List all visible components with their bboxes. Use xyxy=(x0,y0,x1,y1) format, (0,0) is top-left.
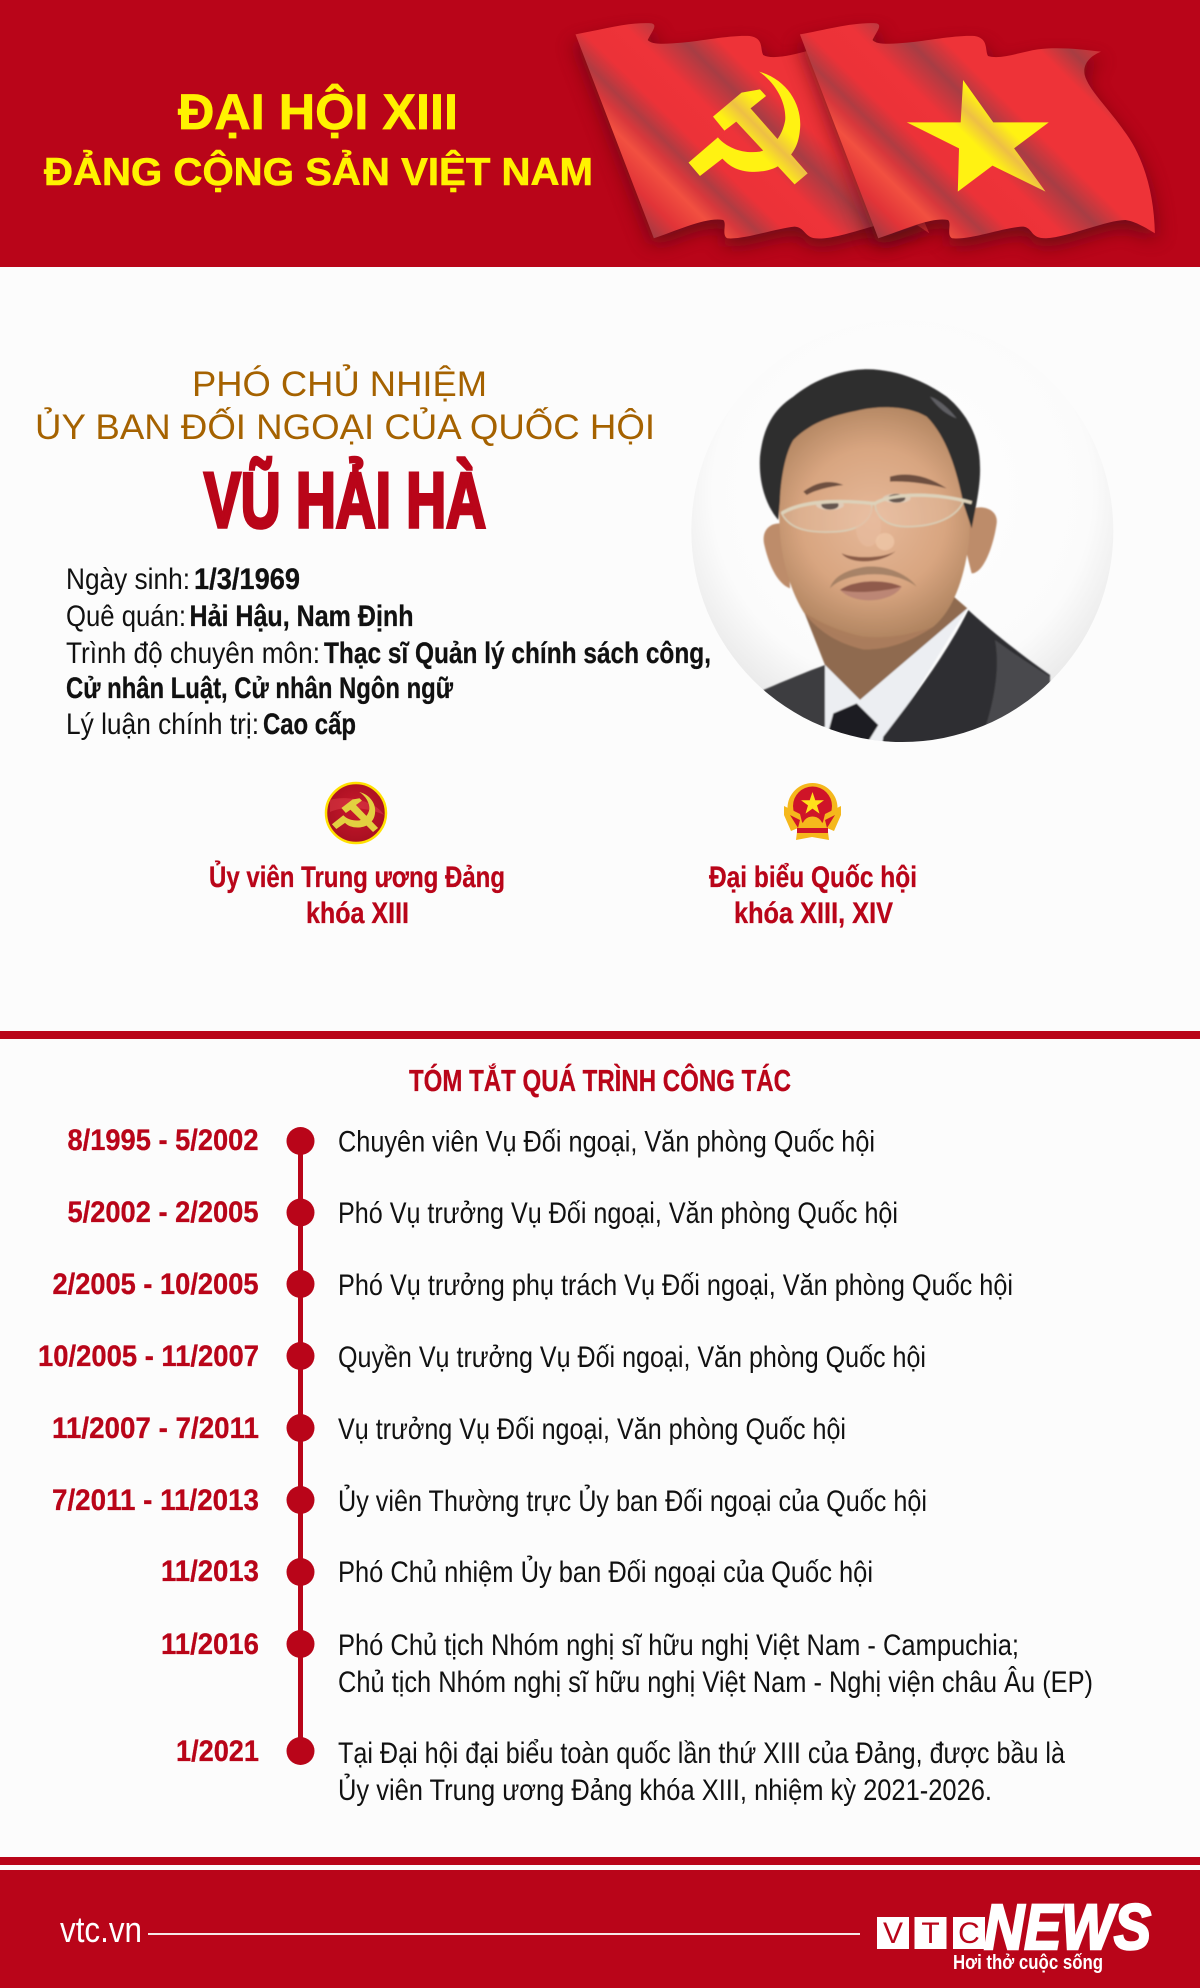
biography facts: Hải Hậu, Nam Định xyxy=(190,600,414,633)
footer background xyxy=(0,1870,1200,1988)
icon: national flag xyxy=(800,23,1155,247)
logo: VTC News: NEWS xyxy=(984,1891,1151,1963)
membership: party central committee: Ủy viên Trung ương Đảng xyxy=(209,860,505,894)
membership: party central committee xyxy=(209,860,505,930)
row 4: 10/2005 - 11/2007 xyxy=(38,1340,259,1373)
logo: VTC News: Hơi thở cuộc sống xyxy=(953,1952,1103,1974)
icon: national emblem xyxy=(784,783,841,840)
row 4: Quyền Vụ trưởng Vụ Đối ngoại, Văn phòng Quốc hội xyxy=(338,1341,926,1374)
row 6: Ủy viên Thường trực Ủy ban Đối ngoại của Quốc hội xyxy=(338,1484,927,1518)
membership: national assembly xyxy=(709,861,917,930)
membership: party central committee: khóa XIII xyxy=(306,897,409,930)
panel: career timeline xyxy=(38,1062,1093,1807)
membership: national assembly: khóa XIII, XIV xyxy=(734,897,893,930)
row 1: Chuyên viên Vụ Đối ngoại, Văn phòng Quốc hội xyxy=(338,1126,875,1158)
membership: national assembly: Đại biểu Quốc hội xyxy=(709,861,917,894)
logo: VTC News: T xyxy=(921,1917,940,1950)
biography facts: Cao cấp xyxy=(263,708,356,741)
biography facts: Lý luận chính trị: xyxy=(66,708,259,741)
job title: PHÓ CHỦ NHIỆM xyxy=(192,364,487,404)
row 8 xyxy=(161,1628,1093,1699)
row 2: 5/2002 - 2/2005 xyxy=(68,1196,258,1229)
website: vtc.vn xyxy=(60,1909,142,1950)
title: ĐẢNG CỘNG SẢN VIỆT NAM xyxy=(44,149,593,194)
row 4 xyxy=(38,1340,926,1374)
row 7 xyxy=(161,1555,873,1589)
row 5 xyxy=(52,1412,846,1446)
row 8: 11/2016 xyxy=(161,1628,259,1661)
row 9 xyxy=(176,1735,1065,1807)
logo: VTC News xyxy=(877,1891,1151,1974)
timeline spine xyxy=(298,1141,303,1751)
row 3: 2/2005 - 10/2005 xyxy=(52,1268,258,1301)
row 2 xyxy=(68,1196,898,1230)
panel: header banner xyxy=(0,0,1200,267)
header background xyxy=(0,0,1200,267)
biography facts xyxy=(66,563,711,741)
biography facts: Trình độ chuyên môn: xyxy=(66,637,320,670)
row 7: 11/2013 xyxy=(161,1555,259,1588)
job title: ỦY BAN ĐỐI NGOẠI CỦA QUỐC HỘI xyxy=(35,407,655,447)
panel: footer xyxy=(0,1870,1200,1988)
panel: profile xyxy=(35,320,1113,930)
row 5: 11/2007 - 7/2011 xyxy=(52,1412,259,1445)
row 9: Ủy viên Trung ương Đảng khóa XIII, nhiệm kỳ 2021-2026. xyxy=(338,1773,992,1807)
logo: VTC News: V xyxy=(883,1917,903,1950)
title xyxy=(44,83,593,194)
biography facts: 1/3/1969 xyxy=(194,563,300,596)
icon: waving flags xyxy=(576,23,1155,247)
biography facts: Ngày sinh: xyxy=(66,563,190,596)
row 1 xyxy=(68,1124,875,1158)
row 3: Phó Vụ trưởng phụ trách Vụ Đối ngoại, Văn phòng Quốc hội xyxy=(338,1269,1013,1302)
icon: party flag xyxy=(576,23,929,247)
icon: party emblem xyxy=(326,783,386,843)
row 9: 1/2021 xyxy=(176,1735,259,1768)
row 6: 7/2011 - 11/2013 xyxy=(52,1484,259,1517)
row 1: 8/1995 - 5/2002 xyxy=(68,1124,258,1157)
logo: VTC News: C xyxy=(958,1917,980,1950)
name: VŨ HẢI HÀ xyxy=(204,456,486,544)
biography facts: Cử nhân Luật, Cử nhân Ngôn ngữ xyxy=(66,672,453,705)
timeline heading: TÓM TẮT QUÁ TRÌNH CÔNG TÁC xyxy=(409,1062,791,1098)
row 8: Phó Chủ tịch Nhóm nghị sĩ hữu nghị Việt Nam - Campuchia; xyxy=(338,1629,1019,1662)
title: ĐẠI HỘI XIII xyxy=(178,83,458,140)
biography facts: Quê quán: xyxy=(66,600,186,633)
biography facts: Thạc sĩ Quản lý chính sách công, xyxy=(324,637,711,670)
row 2: Phó Vụ trưởng Vụ Đối ngoại, Văn phòng Quốc hội xyxy=(338,1197,898,1230)
row 7: Phó Chủ nhiệm Ủy ban Đối ngoại của Quốc hội xyxy=(338,1555,873,1589)
row 5: Vụ trưởng Vụ Đối ngoại, Văn phòng Quốc hội xyxy=(338,1413,846,1446)
row 3 xyxy=(52,1268,1013,1302)
job title xyxy=(35,364,655,447)
row 6 xyxy=(52,1484,927,1518)
portrait photo xyxy=(692,368,1113,742)
row 9: Tại Đại hội đại biểu toàn quốc lần thứ XIII của Đảng, được bầu là xyxy=(338,1737,1065,1770)
